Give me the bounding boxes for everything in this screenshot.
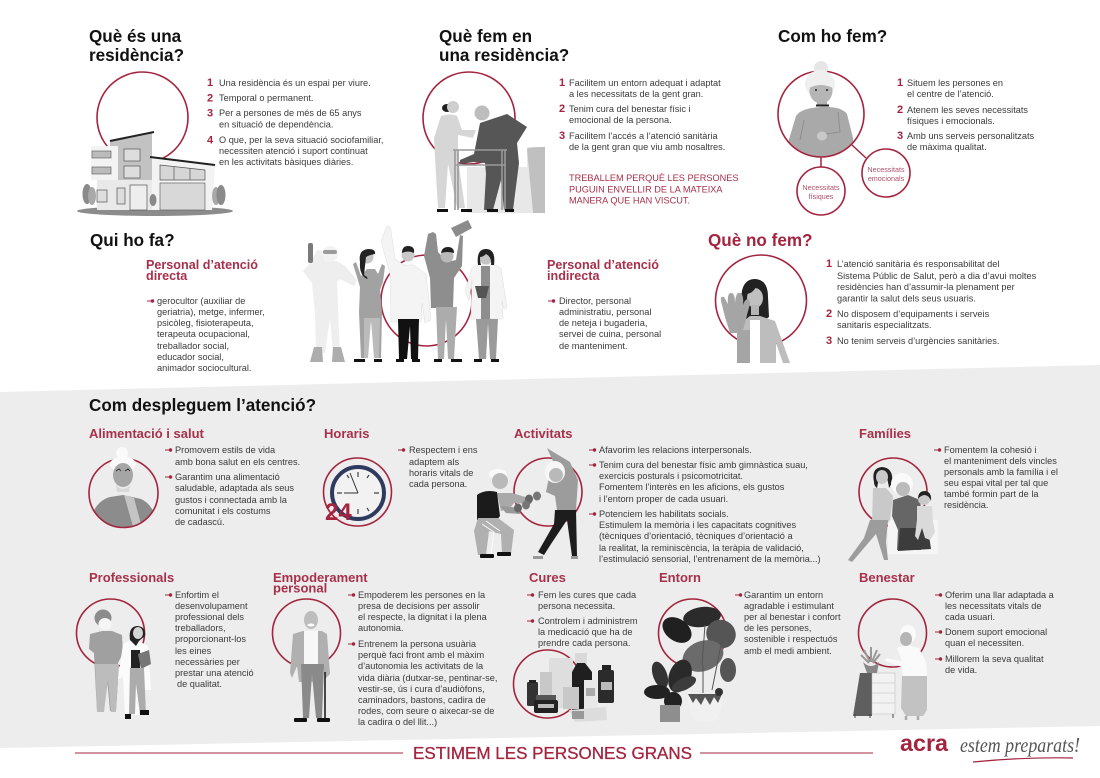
list: personal directe: psicòleg, fisioterapeuta, — [157, 318, 254, 328]
icon: elderly man with cane — [272, 599, 340, 722]
numbered list: Atenem les seves necessitats — [907, 105, 1028, 115]
text block: Donem suport emocional — [945, 627, 1047, 637]
numbered list: Facilitem l’accés a l’atenció sanitària — [569, 131, 718, 141]
numbered list: 2 — [826, 308, 832, 320]
text block: quan el necessiten. — [945, 638, 1024, 648]
numbered list: No tenim serveis d’urgències sanitàries. — [837, 336, 999, 346]
text block: prestar una atenció — [175, 668, 254, 678]
numbered list: de màxima qualitat. — [907, 142, 987, 152]
panel: què és una residència — [77, 27, 383, 216]
text block: exercicis posturals i psicomotricitat. — [599, 471, 743, 481]
icon: woman at dresser with plant — [853, 599, 927, 720]
icon: care staff group — [303, 220, 507, 362]
list: personal directe: treballador social, — [157, 341, 229, 351]
list: personal directe: educador social, — [157, 352, 224, 362]
text block: amb el medi ambient. — [744, 646, 832, 656]
numbered list: 3 — [207, 108, 213, 120]
text block: Respectem i ens — [409, 445, 478, 455]
text block: la medicació que ha de — [538, 627, 632, 637]
numbered list: en situació de dependència. — [219, 120, 333, 130]
text block: cada persona. — [409, 479, 467, 489]
text block: Enfortim el — [175, 590, 219, 600]
text block: Oferim una llar adaptada a — [945, 590, 1055, 600]
text block — [165, 590, 254, 689]
circle: necessitats físiques — [797, 167, 845, 215]
text block — [935, 590, 1055, 675]
icon: house — [77, 72, 233, 216]
text block: comunitat i els costums — [175, 506, 271, 516]
text block: perquè faci front amb el màxim — [358, 650, 484, 660]
icon: clock 24 hours — [324, 458, 392, 526]
text block: la realitat, la reminiscència, la teràpia de validació, — [599, 543, 804, 553]
numbered list: Una residència és un espai per viure. — [219, 78, 371, 88]
numbered list: 3 — [826, 335, 832, 347]
icon: nurse helping elderly man with walker — [423, 72, 545, 213]
text block: i l’entorn proper de cada usuari. — [599, 494, 728, 504]
panel: empoderament personal — [272, 570, 497, 727]
numbered list: emocional de la persona. — [569, 115, 672, 125]
icon: laughing elderly man — [88, 447, 159, 530]
numbered list: en les activitats bàsiques diàries. — [219, 157, 353, 167]
numbered list: Sistema Públic de Salut, però a dia d’avui moltes — [837, 271, 1037, 281]
list: personal directe: terapeuta ocupacional, — [157, 329, 250, 339]
numbered list: 3 — [559, 130, 565, 142]
numbered list: 1 — [897, 77, 903, 89]
panel: què no fem — [708, 231, 1037, 363]
numbered list: físiques i emocionals. — [907, 116, 995, 126]
panel: activitats — [474, 426, 821, 564]
text block: de vida. — [945, 665, 977, 675]
text block: Promovem estils de vida — [175, 445, 276, 455]
numbered list: Facilitem un entorn adequat i adaptat — [569, 78, 721, 88]
text block: de qualitat. — [177, 679, 222, 689]
text block: Fomentem l’interès en les aficions, els gustos — [599, 482, 785, 492]
subheading: personal indirecte: Personal d’atenció — [547, 258, 659, 272]
text block: Fem les cures que cada — [538, 590, 637, 600]
text block: presa de decisions per assolir — [358, 601, 480, 611]
callout: MANERA QUE HAN VISCUT. — [569, 196, 690, 206]
text block: les necessitats vitals de — [945, 601, 1042, 611]
heading: una residència? — [439, 46, 569, 65]
panel: horaris — [324, 426, 478, 526]
text block: cada usuari. — [945, 612, 995, 622]
text block: proporcionant-los — [175, 634, 246, 644]
slogan: ESTIMEM LES PERSONES GRANS — [413, 743, 692, 763]
heading: Què fem en — [439, 27, 532, 46]
heading: Què és una — [89, 27, 182, 46]
text block: horaris vitals de — [409, 468, 473, 478]
panel: com ho fem — [778, 27, 1035, 215]
icon: three generations family — [848, 458, 938, 562]
heading: Com ho fem? — [778, 27, 887, 46]
text block: Entrenem la persona usuària — [358, 639, 477, 649]
circle: necessitats emocionals — [862, 149, 910, 197]
text block: Empoderem les persones en la — [358, 590, 486, 600]
text block: Tenim cura del benestar físic amb gimnàstica suau, — [599, 460, 808, 470]
text block — [735, 590, 841, 656]
callout: PUGUIN ENVELLIR DE LA MATEIXA — [569, 184, 723, 194]
text block: de les persones, — [744, 623, 811, 633]
text block: per al benestar i confort — [744, 612, 841, 622]
text block: amb bona salut en els centres. — [175, 457, 300, 467]
heading: Alimentació i salut — [89, 426, 205, 441]
list: personal directe: gerocultor (auxiliar de — [157, 296, 245, 306]
tagline: estem preparats! — [960, 733, 1080, 757]
text block: l’estimulació sensorial, l’entrenament de la memòria...) — [599, 554, 821, 564]
numbered list: Situem les persones en — [907, 78, 1003, 88]
numbered list: Amb uns serveis personalitzats — [907, 131, 1035, 141]
text block: sostenible i respectuós — [744, 634, 838, 644]
tagline underline — [973, 758, 1073, 762]
panel: professionals — [76, 570, 254, 719]
panel: benestar — [853, 570, 1055, 720]
text block: treballadors, — [175, 623, 226, 633]
text block: d’autonomia les activitats de la — [358, 661, 484, 671]
text block: Millorem la seva qualitat — [945, 654, 1044, 664]
heading: Empoderament — [273, 570, 368, 585]
panel: cures — [514, 570, 638, 722]
panel: famílies — [848, 426, 1058, 562]
text block: residència. — [944, 500, 988, 510]
numbered list: 1 — [559, 77, 565, 89]
text block — [589, 445, 821, 564]
text block: seu espai vital per tal que — [944, 478, 1048, 488]
text block: necessàries per — [175, 657, 240, 667]
text block: adaptem als — [409, 457, 459, 467]
numbered list: 2 — [897, 104, 903, 116]
list: personal indirecte: de manteniment. — [559, 341, 627, 351]
numbered list: el centre de l’atenció. — [907, 89, 994, 99]
icon: two health professionals — [76, 599, 151, 719]
numbered list: 1 — [826, 258, 832, 270]
list: personal indirecte: servei de cuina, personal — [559, 329, 661, 339]
heading: Famílies — [859, 426, 911, 441]
numbered list: necessiten atenció i suport continuat — [219, 146, 368, 156]
heading: residència? — [89, 46, 184, 65]
text block: (tècniques d’orientació, tècniques d’orientació a — [599, 531, 793, 541]
text block: vida diària (dutxar-se, pentinar-se, — [358, 673, 497, 683]
text block: Garantim un entorn — [744, 590, 823, 600]
numbered list: No disposem d’equipaments i serveis — [837, 309, 990, 319]
text block: Garantim una alimentació — [175, 472, 280, 482]
list: personal indirecte: administratiu, personal — [559, 307, 651, 317]
text block: Fomentem la cohesió i — [944, 445, 1036, 455]
numbered list — [207, 77, 383, 167]
footer — [75, 730, 1080, 763]
numbered list: O que, per la seva situació sociofamiliar, — [219, 135, 383, 145]
text block: vestir-se, ús i cura d’audiòfons, — [358, 684, 485, 694]
heading: Entorn — [659, 570, 701, 585]
text block: caminadors, bastons, cadira de — [358, 695, 486, 705]
numbered list: L’atenció sanitària és responsabilitat del — [837, 259, 999, 269]
numbered list: Per a persones de més de 65 anys — [219, 108, 362, 118]
numbered list: 1 — [207, 77, 213, 89]
numbered list: Tenim cura del benestar físic i — [569, 104, 691, 114]
numbered list: a les necessitats de la gent gran. — [569, 89, 703, 99]
text block: de cadascú. — [175, 517, 225, 527]
panel: entorn — [644, 570, 841, 722]
text block: persona necessita. — [538, 601, 615, 611]
icon: woman making stop gesture — [716, 255, 806, 363]
heading: Cures — [529, 570, 566, 585]
circle: necessitats físiques: Necessitats — [802, 183, 840, 192]
list: personal directe: animador sociocultural. — [157, 363, 251, 373]
heading: Benestar — [859, 570, 915, 585]
text block: saludable, adaptada als seus — [175, 483, 294, 493]
panel: què fem en una residència — [423, 27, 739, 213]
text block: agradable i estimulant — [744, 601, 834, 611]
numbered list: de la gent gran que viu amb nosaltres. — [569, 142, 725, 152]
numbered list: 3 — [897, 130, 903, 142]
heading: personal — [273, 580, 327, 596]
numbered list: 4 — [207, 134, 214, 146]
text block: personals amb la família i el — [944, 467, 1058, 477]
list: personal indirecte: de neteja i bugaderia, — [559, 318, 647, 328]
text block: Controlem i administrem — [538, 616, 638, 626]
callout: TREBALLEM PERQUÈ LES PERSONES — [569, 173, 739, 183]
text block: Afavorim les relacions interpersonals. — [599, 445, 752, 455]
text block: rodes, com seure o aixecar-se de — [358, 706, 494, 716]
circle: necessitats emocionals: emocionals — [868, 174, 905, 183]
text block: la cadira o del llit...) — [358, 717, 437, 727]
numbered list — [559, 77, 725, 152]
panel: qui ho fa — [90, 220, 661, 373]
text block — [348, 590, 497, 727]
text block: també formin part de la — [944, 489, 1039, 499]
numbered list: 2 — [207, 92, 213, 104]
text block: Potenciem les habilitats socials. — [599, 509, 729, 519]
text block — [934, 445, 1058, 510]
list: personal indirecte: Director, personal — [559, 296, 631, 306]
text block: Estimulem la memòria i les capacitats cognitives — [599, 520, 796, 530]
icon: elderly people exercising — [474, 448, 582, 559]
subheading: personal directe: directa — [146, 269, 188, 283]
text block: professional dels — [175, 612, 244, 622]
text block: desenvolupament — [175, 601, 248, 611]
heading: Professionals — [89, 570, 174, 585]
heading: Qui ho fa? — [90, 231, 175, 250]
text block — [165, 445, 300, 527]
icon: elderly woman in circle — [778, 61, 864, 170]
numbered list: sanitaris especialitzats. — [837, 320, 931, 330]
list: personal indirecte — [548, 296, 661, 351]
text block: gustos i connectada amb la — [175, 495, 288, 505]
numbered list — [826, 258, 1037, 347]
logo: acra: acra — [900, 730, 948, 756]
icon: clock 24 hours: 24 — [325, 499, 352, 526]
heading: com despleguem l'atenció: Com despleguem l’atenció? — [89, 396, 316, 415]
subheading: personal indirecte: indirecta — [547, 269, 600, 283]
numbered list — [897, 77, 1035, 152]
text block — [398, 445, 478, 489]
heading: Horaris — [324, 426, 370, 441]
icon: potted plants — [644, 599, 741, 722]
circle: necessitats físiques: físiques — [809, 192, 834, 201]
heading: Què no fem? — [708, 231, 812, 250]
numbered list: residències han d’assumir-la plenament per — [837, 282, 1015, 292]
icon: medicine bottles — [514, 650, 614, 722]
subheading: personal directe: Personal d’atenció — [146, 258, 258, 272]
list: personal directe — [147, 296, 265, 373]
text block: autonomia. — [358, 623, 403, 633]
numbered list: 2 — [559, 103, 565, 115]
text block: les eines — [175, 646, 212, 656]
heading: Activitats — [514, 426, 573, 441]
list: personal directe: geriatria), metge, infermer, — [157, 307, 265, 317]
grey background band — [0, 365, 1100, 748]
circle: necessitats emocionals: Necessitats — [867, 165, 905, 174]
text block — [527, 590, 638, 648]
numbered list: Temporal o permanent. — [219, 93, 313, 103]
text block: el respecte, la dignitat i la plena — [358, 612, 488, 622]
text block: prendre cada persona. — [538, 638, 630, 648]
numbered list: garantir la salut dels seus usuaris. — [837, 294, 976, 304]
connectors — [821, 145, 866, 167]
text block: el manteniment dels vincles — [944, 456, 1057, 466]
panel: alimentació i salut — [88, 426, 300, 530]
